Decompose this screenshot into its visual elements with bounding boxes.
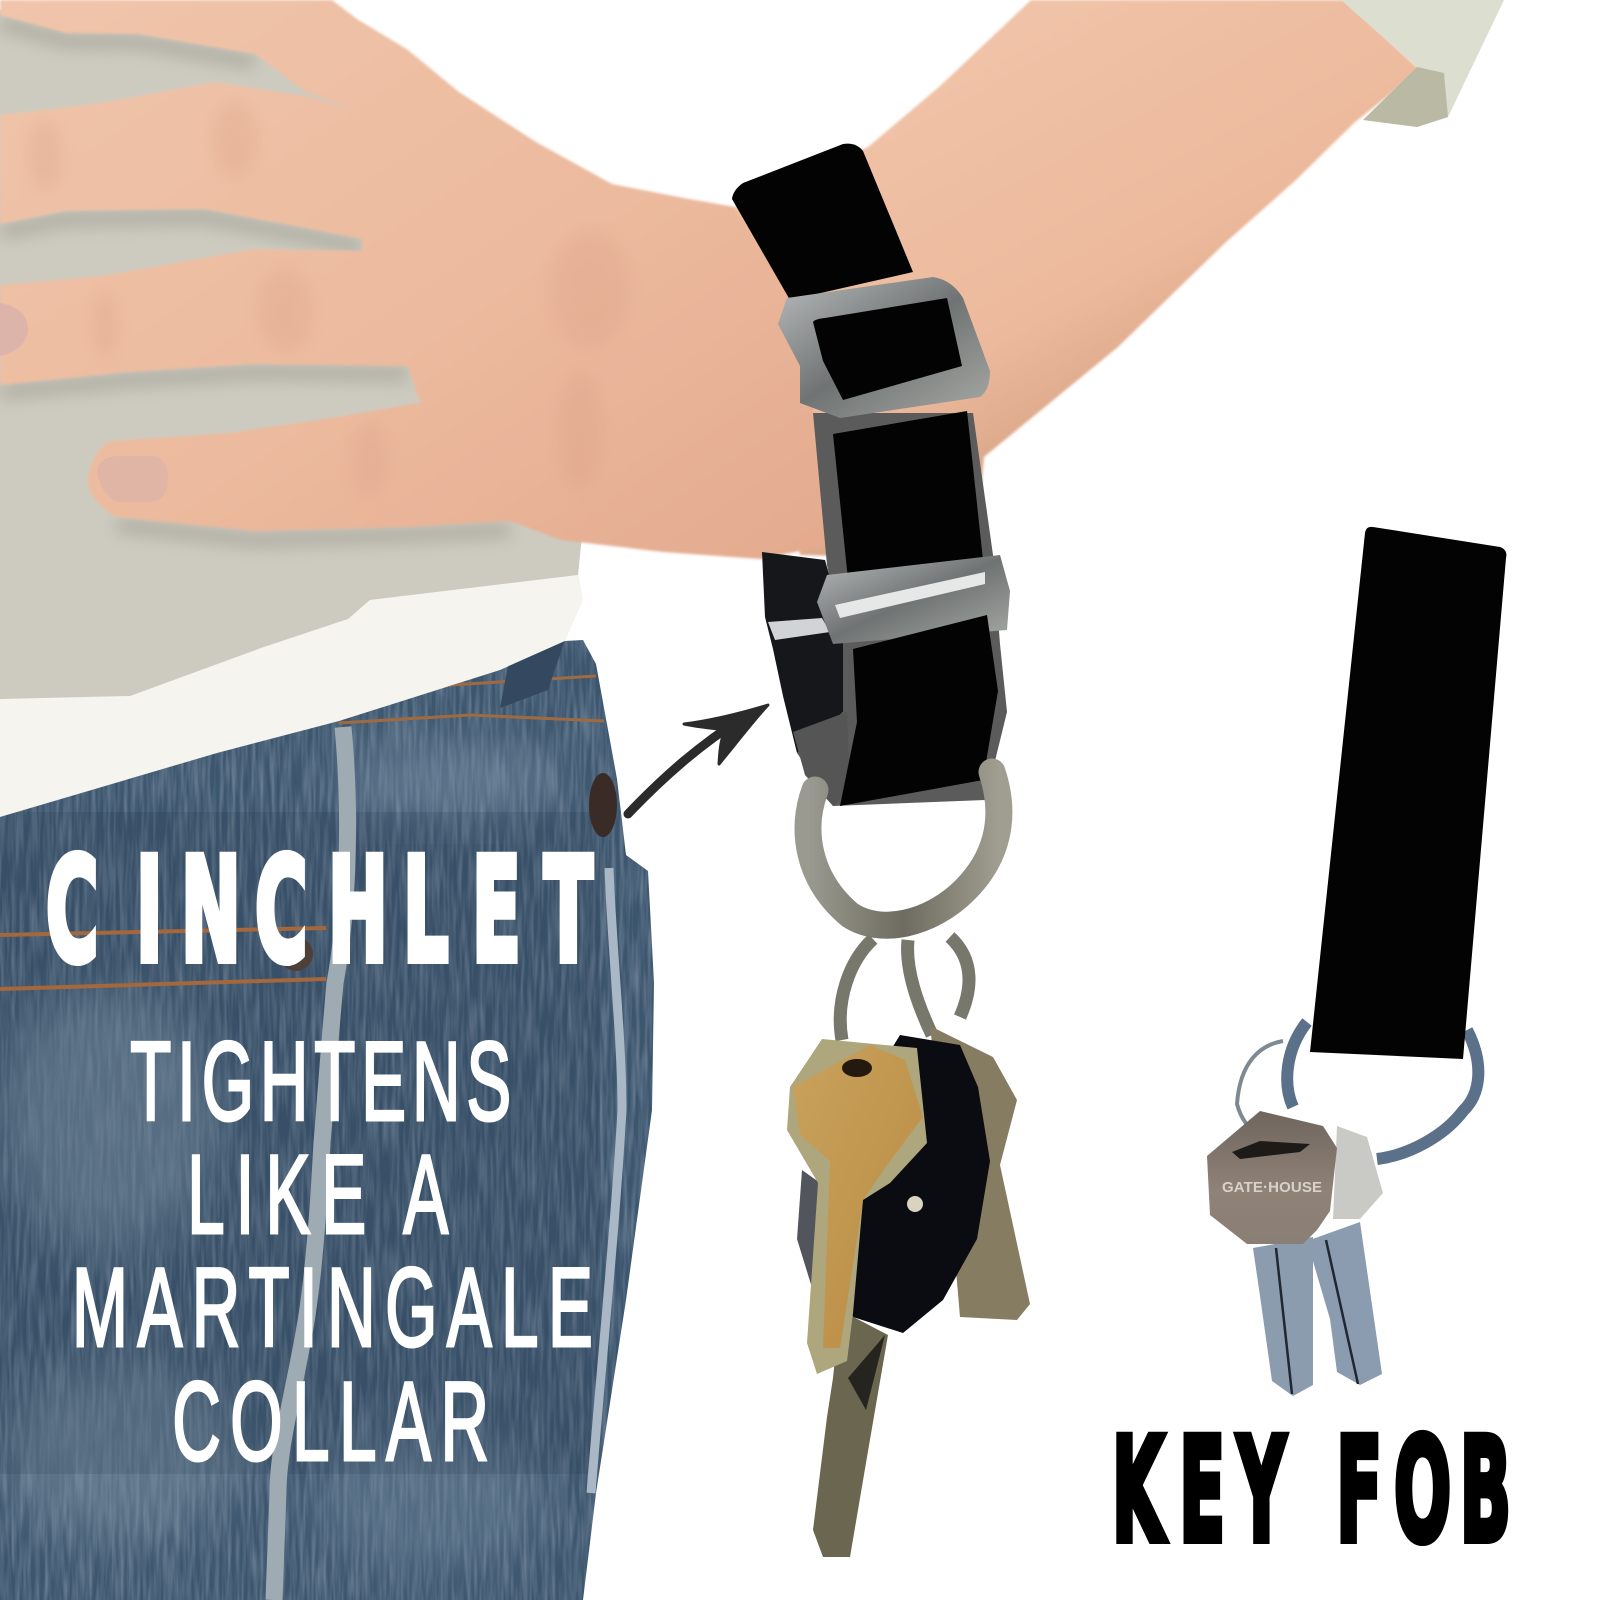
jeans bbox=[0, 620, 670, 1600]
grey fob edge bbox=[797, 1170, 830, 1291]
undershirt bbox=[0, 555, 583, 817]
heading: Cinchlet: CINCHLET bbox=[46, 827, 593, 994]
small ring bbox=[1237, 1041, 1300, 1148]
blade grooves bbox=[1276, 1240, 1358, 1394]
brass key bbox=[793, 1045, 923, 1348]
front key blade bbox=[1253, 1237, 1313, 1396]
strap in upper slider bbox=[813, 298, 962, 400]
black fob bbox=[830, 1035, 990, 1333]
slider highlight bbox=[835, 572, 985, 618]
hand bbox=[0, 0, 830, 559]
long key shadow bbox=[848, 1335, 885, 1410]
description text: LIKE A bbox=[187, 1131, 448, 1257]
strap middle bbox=[833, 411, 983, 599]
knuckle shading bbox=[27, 102, 630, 498]
wrist strap bbox=[732, 144, 1010, 925]
strap top bbox=[732, 144, 913, 300]
lower slider bbox=[817, 555, 1010, 644]
sleeve bbox=[1341, 0, 1504, 127]
pocket stitching bbox=[0, 928, 326, 989]
key slot bbox=[1232, 1141, 1310, 1159]
grey webbing bbox=[797, 413, 1007, 806]
key brand: GATE·HOUSE bbox=[1222, 1179, 1322, 1196]
arrow bbox=[628, 705, 768, 814]
d ring bbox=[808, 772, 999, 925]
fob strap bbox=[1310, 527, 1506, 1059]
center seam bbox=[274, 727, 348, 1600]
front key head bbox=[1207, 1111, 1337, 1244]
metal ring bbox=[1287, 1022, 1478, 1159]
description text bbox=[72, 1018, 593, 1484]
upper slider bbox=[778, 277, 990, 418]
shirt bbox=[0, 10, 582, 699]
text backing panel bbox=[0, 812, 600, 1474]
belt loop bbox=[500, 640, 565, 708]
description text: COLLAR bbox=[172, 1358, 489, 1484]
fingernail: middle finger bbox=[0, 303, 28, 356]
key fob product bbox=[1207, 527, 1506, 1396]
waist stitching bbox=[339, 676, 604, 723]
rear key blade bbox=[1307, 1222, 1382, 1385]
long key bbox=[813, 1310, 888, 1557]
fingernail: thumb bbox=[97, 456, 168, 502]
grey webbing lower patch bbox=[793, 712, 850, 806]
forearm bbox=[735, 0, 1420, 560]
inner strap loop bbox=[762, 552, 850, 753]
label: key fob: KEY FOB bbox=[1112, 1408, 1511, 1575]
strap bottom bbox=[840, 615, 998, 806]
key rings bbox=[840, 937, 969, 1040]
fob button bbox=[907, 1196, 923, 1212]
rear key head bbox=[1333, 1126, 1383, 1219]
brass key backing bbox=[787, 1039, 927, 1374]
button bbox=[589, 773, 617, 837]
key hole bbox=[842, 1059, 872, 1077]
rivet bbox=[284, 937, 313, 971]
description text: TIGHTENS bbox=[130, 1018, 511, 1144]
inner loop highlight bbox=[768, 618, 830, 640]
description text: MARTINGALE bbox=[72, 1244, 593, 1370]
wrist keys bbox=[787, 937, 1030, 1557]
finger shadows on shirt bbox=[0, 23, 510, 540]
silver key behind bbox=[930, 1026, 1030, 1320]
side seam bbox=[591, 868, 622, 1493]
